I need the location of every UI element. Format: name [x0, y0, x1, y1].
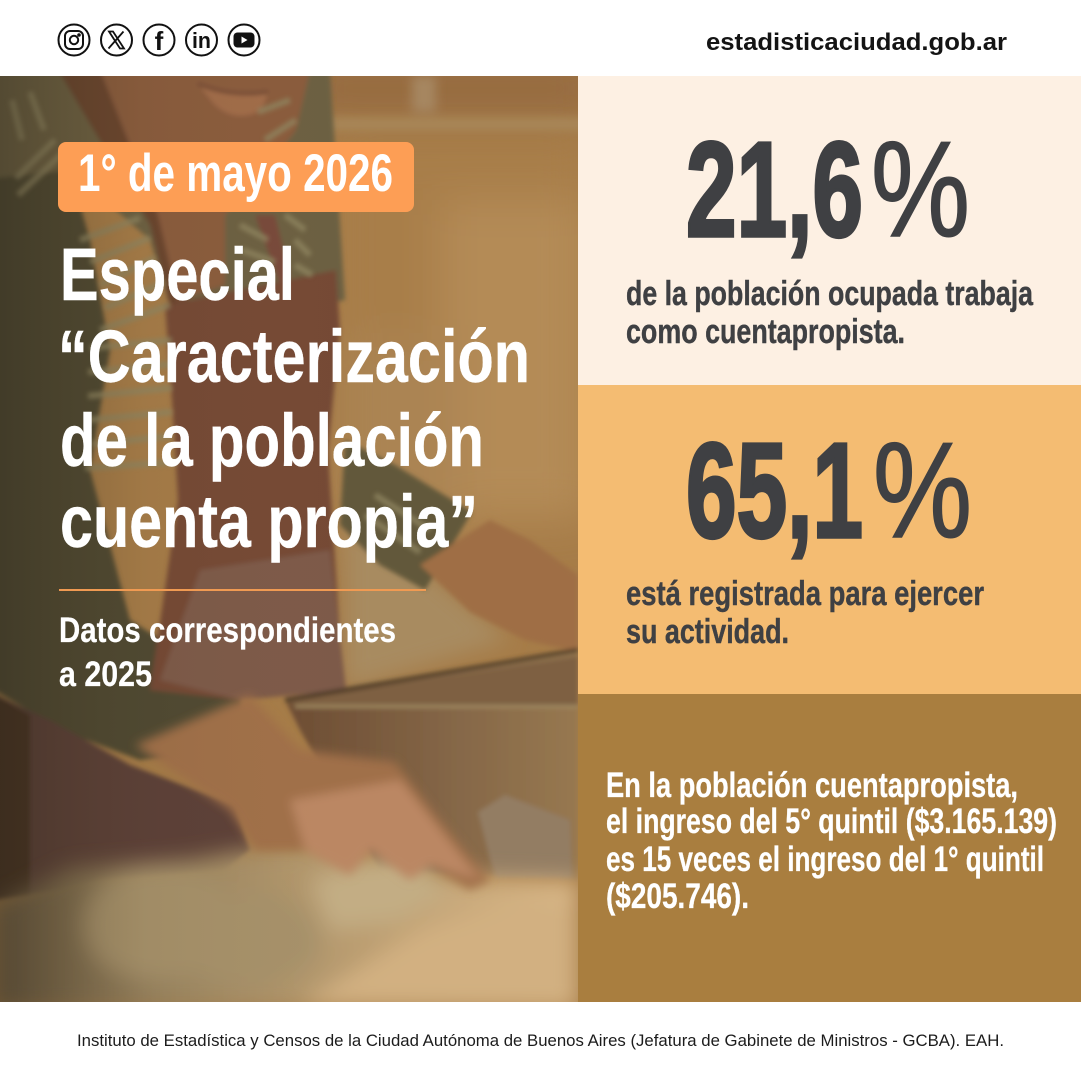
big number 21,6%: % [871, 113, 970, 265]
icon: instagram [58, 24, 90, 56]
title: “Caracterización [58, 315, 530, 398]
panel: photo of hands kneading dough [0, 60, 600, 1010]
flour pile [478, 795, 572, 878]
icon: X [101, 24, 132, 56]
stat description: como cuentapropista. [626, 313, 905, 351]
stat description [626, 275, 1034, 351]
title: de la población [60, 399, 484, 482]
date badge: 1° de mayo 2026 [78, 144, 393, 203]
social media icons [58, 24, 260, 56]
panel: income statement [578, 694, 1081, 1002]
icon: facebook: f [155, 26, 164, 56]
mouth [203, 88, 267, 116]
income text: ($205.746). [606, 877, 749, 916]
stat description: está registrada para ejercer [626, 575, 984, 613]
subtitle [59, 611, 396, 694]
stat description [626, 575, 984, 651]
apron [150, 270, 346, 700]
right sleeve [340, 440, 472, 590]
big number 65,1%: 65,1 [686, 415, 863, 566]
face and neck [100, 70, 310, 300]
shelf line [310, 118, 590, 130]
subtitle: Datos correspondientes [59, 611, 396, 650]
title: Especial [60, 233, 295, 316]
stat description: su actividad. [626, 613, 789, 651]
title [58, 233, 530, 563]
big number 65,1%: % [873, 414, 972, 566]
icon: linkedin [186, 24, 217, 56]
table backdrop [340, 536, 502, 685]
dark sleeve [0, 170, 245, 760]
right hand [420, 520, 578, 652]
source footer: Instituto de Estadística y Censos de la Ciudad Autónoma de Buenos Aires (Jefatura de Gabinete de Ministros - GCBA). EAH. [77, 1031, 1004, 1050]
panel: stat 65,1% [578, 385, 1081, 694]
dough body [0, 845, 578, 1010]
purple clothing [0, 695, 250, 900]
date badge [58, 142, 414, 212]
mixing bowl [285, 650, 578, 880]
icon: linkedin: in [192, 28, 211, 53]
website url: estadisticaciudad.gob.ar [706, 29, 1007, 56]
shirt [0, 76, 347, 303]
big number 21,6%: 21,6 [686, 114, 863, 265]
icon: facebook [144, 24, 174, 56]
forearm and hand [135, 695, 490, 890]
apron strap [61, 76, 186, 304]
title: cuenta propia” [60, 480, 478, 563]
icon: youtube [228, 24, 260, 56]
stripes on shirt [12, 92, 430, 552]
subtitle: a 2025 [59, 655, 152, 694]
panel: stat 21,6% [578, 76, 1081, 385]
income text [606, 766, 1057, 916]
